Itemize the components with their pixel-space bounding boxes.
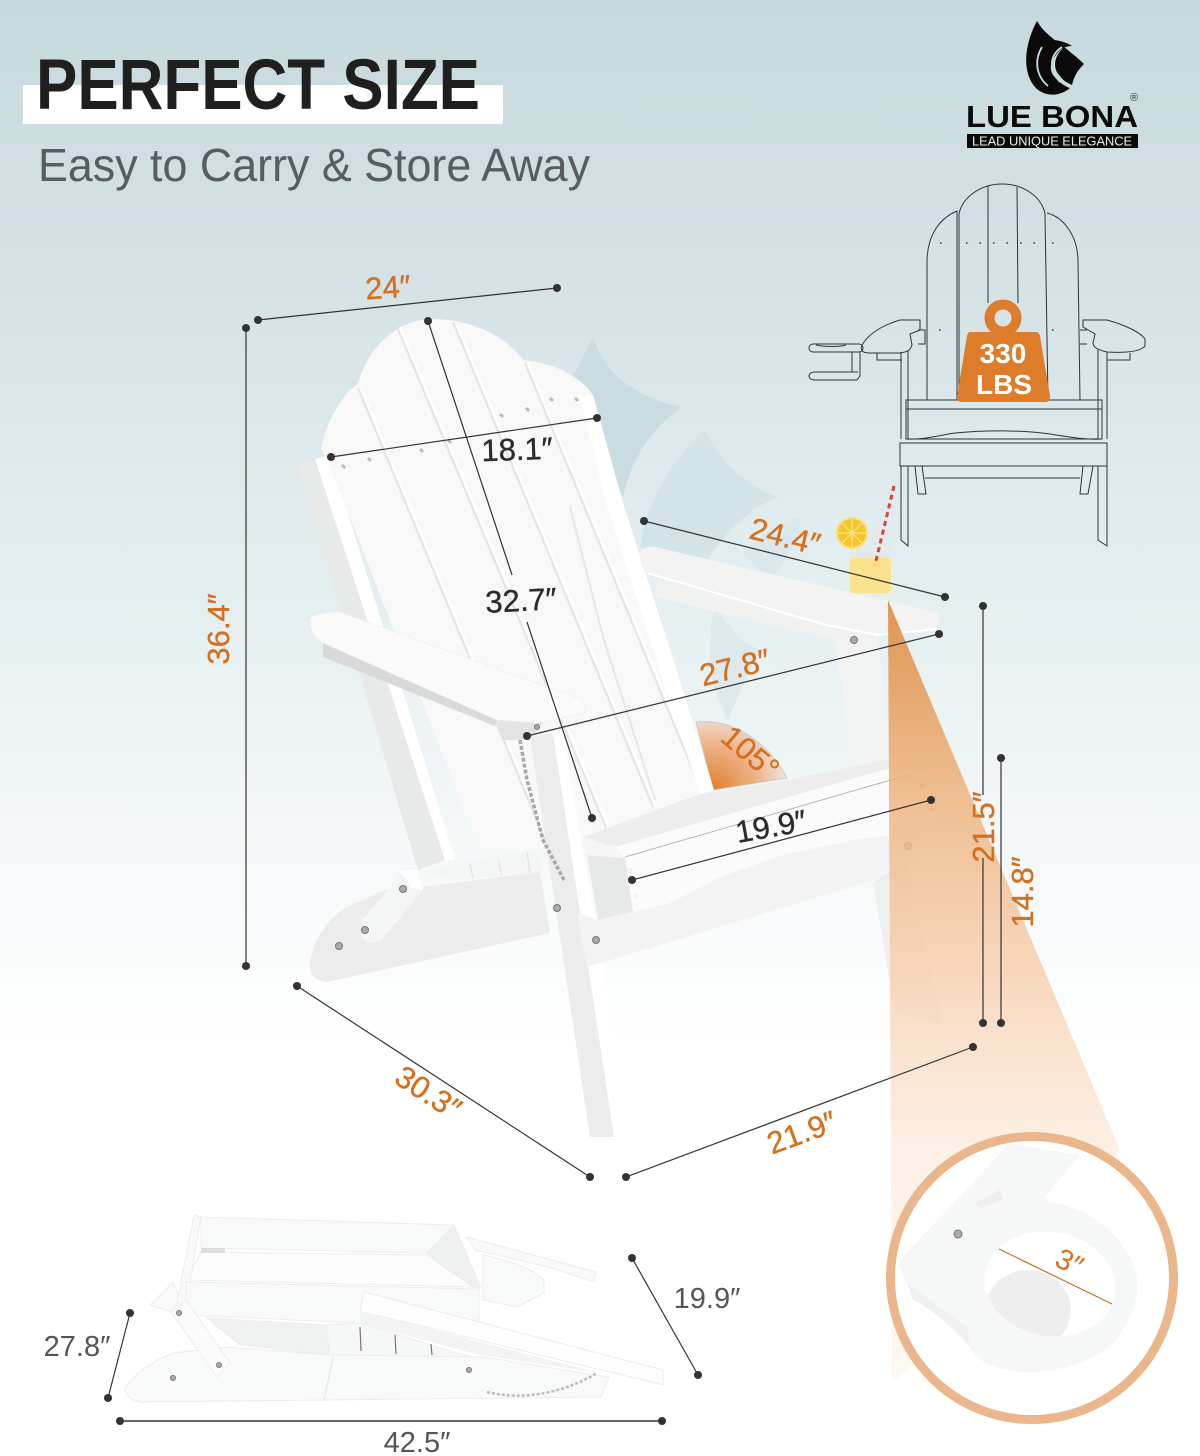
dimension: 27.8 inch between arms: 27.8″	[696, 642, 774, 693]
icon: 330 LBS weight: 330	[980, 338, 1026, 369]
dimension: 14.8 inch seat height: 14.8″	[1005, 856, 1040, 928]
chair: seat slats behind leg	[423, 848, 542, 880]
dimension: 19.9 inch seat width: 19.9″	[733, 803, 809, 850]
chair: left arm under-shadow and bracket	[323, 643, 543, 740]
dimension: 21.9 inch base width	[622, 1043, 977, 1181]
dimension: folded 19.9 inch	[628, 1254, 740, 1379]
dimension: 27.8 inch between arms	[523, 630, 943, 740]
dimension: 30.3 inch depth	[293, 982, 594, 1181]
cup holder detail circle: 3″	[1050, 1243, 1088, 1283]
title: PERFECT SIZE: PERFECT SIZE	[36, 46, 480, 125]
chair: backrest	[321, 319, 714, 850]
chair: front left leg	[530, 732, 631, 1137]
brand logo: LUE BONA: LUE BONA	[966, 99, 1138, 134]
brand logo: LUE BONA: ®	[1130, 92, 1138, 104]
chair: front rail	[577, 833, 917, 967]
dimension: 24.4 inch arm length: 24.4″	[746, 511, 824, 562]
dimension: folded 27.8 inch	[44, 1309, 134, 1402]
dimension: 24 inch width	[254, 268, 561, 324]
folded chair	[125, 1215, 663, 1402]
subtitle: Easy to Carry & Store Away	[38, 139, 590, 191]
chair: right rear arm support	[833, 627, 890, 765]
dimension: 19.9 inch seat width	[628, 796, 935, 884]
dimension: folded 27.8 inch: 27.8″	[44, 1331, 110, 1363]
dimension: 24 inch width: 24″	[364, 268, 412, 307]
brand logo: LUE BONA: LEAD UNIQUE ELEGANCE	[972, 134, 1132, 148]
chair: footrest rail	[310, 872, 550, 982]
dimension: 21.5 inch arm height	[966, 602, 1001, 1027]
recline angle label: 105°: 105°	[715, 719, 786, 787]
chair: folding link	[336, 870, 423, 950]
chair: rear side rail and back leg	[297, 455, 455, 870]
dimension: 32.7 inch back height: 32.7″	[484, 581, 558, 620]
dimension: 18.1 inch back width	[327, 414, 601, 468]
icon: 330 LBS weight	[957, 304, 1050, 402]
dimension: 24.4 inch arm length	[640, 511, 949, 601]
chair: right front leg	[873, 842, 943, 1025]
dimension: 18.1 inch back width: 18.1″	[481, 431, 553, 468]
dimension: 36.4 inch height	[201, 324, 250, 970]
dimension: 21.9 inch base width: 21.9″	[762, 1104, 841, 1161]
chair: chain	[520, 740, 565, 882]
dimension: folded 42.5 inch	[116, 1417, 666, 1456]
recline angle wedge	[696, 722, 787, 790]
chair: left armrest	[310, 612, 585, 723]
chair: seat	[583, 760, 938, 920]
dimension: 32.7 inch back height	[424, 317, 596, 822]
line drawing of chair front view	[809, 184, 1145, 546]
dimension: 21.5 inch arm height: 21.5″	[966, 791, 1001, 863]
dimension: 36.4 inch height: 36.4″	[201, 593, 236, 665]
dimension: 14.8 inch seat height	[997, 754, 1040, 1027]
background watermark logo	[574, 337, 800, 720]
dimension: folded 19.9 inch: 19.9″	[674, 1283, 740, 1315]
dimension: 30.3 inch depth: 30.3″	[389, 1058, 468, 1127]
brand logo: LUE BONA	[966, 21, 1138, 148]
icon: 330 LBS weight: LBS	[976, 369, 1032, 400]
chair: right armrest	[640, 547, 939, 644]
main white Adirondack chair	[297, 319, 943, 1137]
drink glass with lemon and straw	[837, 486, 894, 593]
cup holder detail circle	[890, 1136, 1174, 1420]
orange projection beam to cup holder	[888, 600, 1120, 1382]
cup holder: arm and ring	[897, 1143, 1137, 1372]
